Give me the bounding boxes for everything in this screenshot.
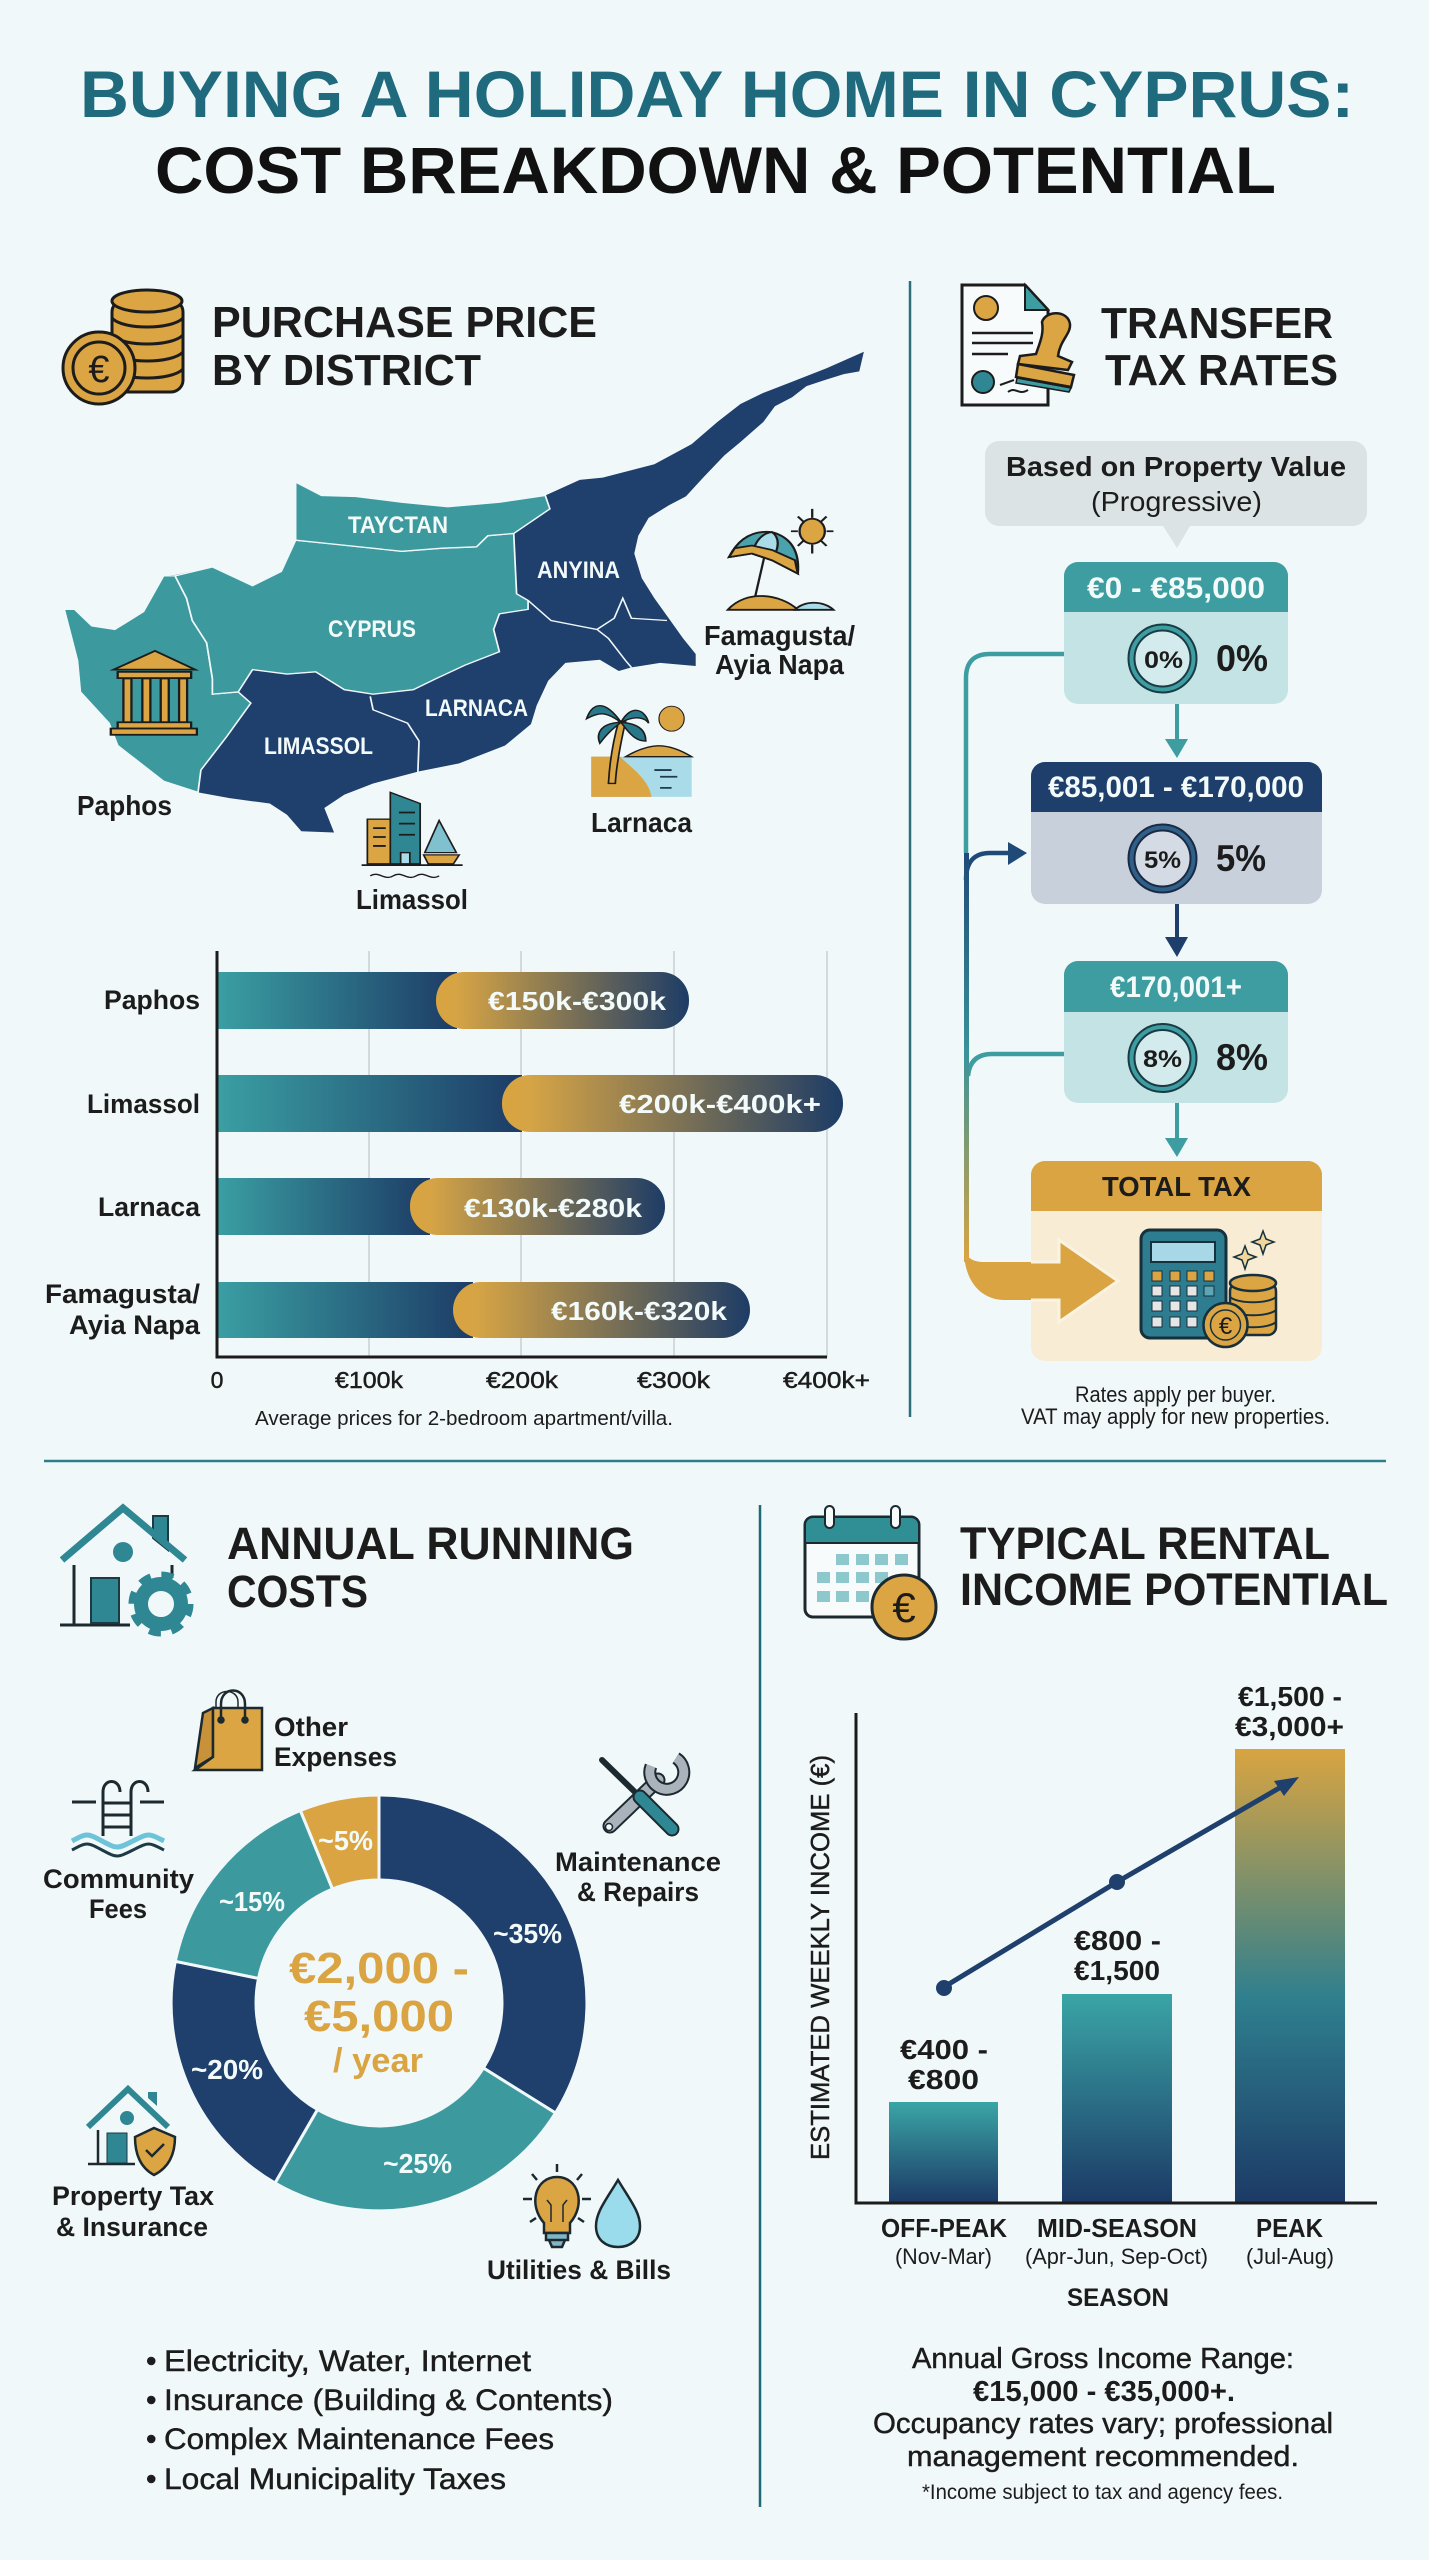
bullet list: Local Municipality Taxes	[164, 2463, 506, 2496]
category labels: Larnaca	[98, 1192, 201, 1222]
callout: based on property value: (Progressive)	[1091, 486, 1262, 517]
tier: 0 percent: 0%	[1216, 638, 1268, 679]
heading: annual running costs	[227, 1518, 634, 1617]
icon: light bulb and water drop	[523, 2164, 640, 2247]
season labels: (Jul-Aug)	[1246, 2244, 1334, 2269]
bar: mid-season: €800 -	[1074, 1925, 1161, 1956]
icon: palm beach	[587, 706, 692, 797]
center total: €5,000	[304, 1992, 454, 2041]
bar: peak: €3,000+	[1235, 1711, 1344, 1742]
category labels: Ayia Napa	[69, 1310, 201, 1340]
season labels: SEASON	[1067, 2284, 1169, 2312]
heading: transfer tax rates: TRANSFER	[1101, 299, 1333, 348]
heading: annual running costs: COSTS	[227, 1566, 368, 1617]
bar chart: price ranges	[45, 951, 870, 1430]
icon: shopping bag	[195, 1690, 262, 1770]
axis tick labels: €400k+	[783, 1367, 870, 1393]
icon: calculator and coins: €	[1219, 1313, 1233, 1340]
heading: purchase price: PURCHASE PRICE	[212, 298, 597, 347]
bar: off-peak: €400 -	[900, 2034, 988, 2065]
category labels: Famagusta/	[45, 1279, 201, 1309]
icon: calendar and euro coin: €	[892, 1584, 916, 1631]
tier: 8 percent	[1064, 961, 1288, 1103]
bullet list: Insurance (Building & Contents)	[164, 2384, 613, 2417]
label: other expenses: Other	[274, 1712, 348, 1742]
percent labels: ~15%	[219, 1886, 285, 1917]
label: property tax and insurance	[52, 2181, 214, 2242]
percent labels: ~5%	[318, 1825, 373, 1856]
tier: 0 percent	[1064, 562, 1288, 704]
icon: pool ladder	[72, 1782, 164, 1856]
bar: Famagusta	[217, 1282, 750, 1338]
chart note: Average prices for 2-bedroom apartment/villa.	[255, 1408, 673, 1430]
summary text: Occupancy rates vary; professional	[873, 2408, 1333, 2440]
heading: transfer tax rates: TAX RATES	[1105, 346, 1338, 395]
segment: community 15	[175, 1810, 332, 1978]
bar: Larnaca: €130k-€280k	[464, 1193, 643, 1223]
callout: based on property value: Based on Property Value	[1006, 451, 1346, 482]
label: maintenance and repairs: & Repairs	[577, 1877, 699, 1907]
tier: 0 percent: €0 - €85,000	[1087, 572, 1265, 605]
y axis title: ESTIMATED WEEKLY INCOME (€)	[805, 1755, 835, 2160]
bar: Larnaca	[217, 1178, 665, 1235]
flow connectors	[964, 654, 1118, 1322]
heading: purchase price	[212, 298, 597, 395]
note: rates: VAT may apply for new properties.	[1021, 1404, 1330, 1429]
total tax box: TOTAL TAX	[1102, 1171, 1251, 1202]
tier: 5 percent: €85,001 - €170,000	[1048, 771, 1304, 804]
label: property tax and insurance: & Insurance	[56, 2212, 208, 2242]
bar: off-peak	[889, 2034, 998, 2203]
summary text	[873, 2343, 1333, 2504]
bar: Famagusta: €160k-€320k	[551, 1296, 728, 1326]
map labels: Famagusta/	[704, 620, 855, 651]
icon: house and gear	[60, 1508, 190, 1633]
map labels: LIMASSOL	[264, 733, 373, 760]
tier: 8 percent: 8%	[1143, 1046, 1182, 1073]
percent labels: ~20%	[191, 2054, 263, 2085]
map labels: TAYCTAN	[348, 512, 448, 539]
label: community fees	[43, 1864, 194, 1924]
bar: Limassol	[217, 1075, 843, 1132]
icon: house and shield	[88, 2089, 175, 2175]
category labels: Paphos	[104, 985, 200, 1015]
panel: annual running costs	[43, 1508, 721, 2496]
bar: peak	[1235, 1681, 1345, 2203]
season labels	[881, 2213, 1334, 2312]
bullet list: •	[146, 2423, 157, 2456]
panel: purchase price by district	[45, 290, 870, 1430]
heading: rental income: INCOME POTENTIAL	[960, 1564, 1388, 1615]
heading: transfer tax rates	[1101, 299, 1338, 395]
arrow: tier 1 to tier 2	[1165, 704, 1188, 758]
bullet list: •	[146, 2384, 157, 2417]
season labels: PEAK	[1256, 2213, 1323, 2243]
bar: mid-season	[1062, 1925, 1172, 2203]
summary text: *Income subject to tax and agency fees.	[922, 2481, 1283, 2504]
bullet list	[146, 2345, 613, 2496]
bullet list: •	[146, 2345, 157, 2378]
note: rates	[1021, 1382, 1330, 1429]
summary text: Annual Gross Income Range:	[912, 2343, 1294, 2375]
map labels: Limassol	[356, 884, 468, 915]
center total: €2,000 -	[289, 1944, 469, 1993]
axis tick labels: 0	[211, 1367, 223, 1393]
tier: 5 percent	[1031, 762, 1322, 904]
tier: 5 percent: 5%	[1216, 838, 1266, 879]
percent labels: ~35%	[493, 1918, 562, 1949]
segment: maintenance 35	[379, 1795, 587, 2113]
heading: purchase price: BY DISTRICT	[212, 346, 481, 395]
label: maintenance and repairs	[555, 1847, 721, 1907]
map labels: ANYINA	[537, 557, 620, 584]
axis tick labels: €100k	[335, 1367, 404, 1393]
heading: rental income: TYPICAL RENTAL	[960, 1518, 1330, 1569]
label: utilities and bills: Utilities & Bills	[487, 2255, 671, 2285]
map of Cyprus	[64, 352, 864, 877]
panel: transfer tax rates	[962, 285, 1367, 1429]
trend arrow	[936, 1777, 1299, 1996]
arrow: tier 3 to total	[1165, 1103, 1188, 1157]
summary text: €15,000 - €35,000+.	[973, 2376, 1235, 2408]
icon: calculator and coins	[1141, 1230, 1276, 1347]
bar: peak: €1,500 -	[1238, 1681, 1342, 1712]
season labels: MID-SEASON	[1037, 2213, 1197, 2243]
callout: based on property value	[985, 441, 1367, 548]
bar: Paphos	[217, 972, 689, 1029]
label: property tax and insurance: Property Tax	[52, 2181, 214, 2211]
segment: utilities 25	[275, 2068, 556, 2211]
title: COST BREAKDOWN & POTENTIAL	[155, 133, 1276, 207]
icon: calendar and euro coin	[805, 1506, 936, 1639]
map labels: CYPRUS	[328, 616, 416, 643]
tier: 8 percent: 8%	[1216, 1037, 1268, 1078]
segment: other 5	[300, 1795, 379, 1889]
summary text: management recommended.	[907, 2441, 1299, 2473]
panel: typical rental income potential	[805, 1506, 1388, 2504]
icon: euro coins: €	[88, 349, 110, 391]
segment: property tax 20	[171, 1961, 318, 2183]
axis tick labels	[211, 1367, 870, 1393]
season labels: (Nov-Mar)	[895, 2244, 992, 2269]
heading: rental income	[960, 1518, 1388, 1615]
bar: Paphos: €150k-€300k	[488, 986, 667, 1016]
percent labels	[191, 1825, 562, 2179]
label: maintenance and repairs: Maintenance	[555, 1847, 721, 1877]
icon: wrench and screwdriver	[602, 1758, 684, 1830]
tier: 0 percent: 0%	[1144, 647, 1183, 674]
bar: off-peak: €800	[908, 2064, 979, 2095]
tier: 8 percent: €170,001+	[1110, 971, 1242, 1004]
icon: beach umbrella and sun	[728, 509, 833, 610]
bar: mid-season: €1,500	[1074, 1955, 1160, 1986]
note: rates: Rates apply per buyer.	[1075, 1382, 1276, 1407]
bar: Limassol: €200k-€400k+	[619, 1089, 821, 1119]
map labels: Paphos	[77, 790, 172, 821]
category labels: Limassol	[87, 1089, 200, 1119]
icon: euro coins	[63, 290, 183, 404]
bullet list: •	[146, 2463, 157, 2496]
label: community fees: Fees	[89, 1894, 147, 1924]
title: BUYING A HOLIDAY HOME IN CYPRUS:	[80, 57, 1354, 131]
arrow: tier 2 to tier 3	[1165, 904, 1188, 957]
map labels	[77, 512, 855, 915]
icon: temple	[111, 651, 197, 735]
donut chart	[171, 1795, 587, 2211]
label: community fees: Community	[43, 1864, 194, 1894]
label: other expenses: Expenses	[274, 1742, 397, 1772]
percent labels: ~25%	[383, 2148, 452, 2179]
category labels	[45, 985, 201, 1340]
bullet list: Complex Maintenance Fees	[164, 2423, 554, 2456]
axis tick labels: €200k	[486, 1367, 559, 1393]
bullet list: Electricity, Water, Internet	[164, 2345, 532, 2378]
axis tick labels: €300k	[637, 1367, 711, 1393]
season labels: OFF-PEAK	[881, 2213, 1007, 2243]
map labels: Larnaca	[591, 807, 692, 838]
season labels: (Apr-Jun, Sep-Oct)	[1025, 2244, 1208, 2269]
icon: city and boat	[362, 792, 463, 877]
title	[80, 57, 1354, 207]
center total: / year	[333, 2042, 423, 2080]
total tax box	[1031, 1161, 1322, 1361]
tier: 5 percent: 5%	[1144, 847, 1181, 874]
label: other expenses	[274, 1712, 397, 1772]
heading: annual running costs: ANNUAL RUNNING	[227, 1518, 634, 1569]
icon: document and stamp	[962, 285, 1074, 405]
map labels: Ayia Napa	[715, 649, 844, 680]
center total	[289, 1944, 469, 2080]
map labels: LARNACA	[425, 695, 528, 722]
bar chart: weekly income	[805, 1681, 1377, 2312]
